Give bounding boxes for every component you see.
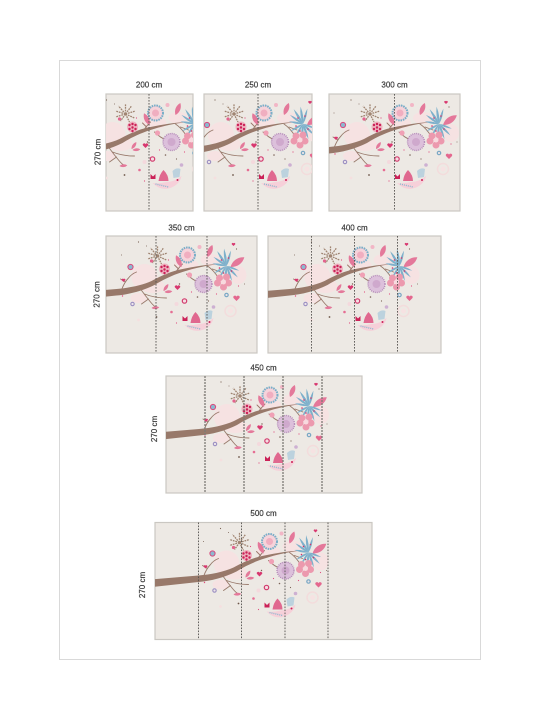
panel: 400 cm	[230, 224, 441, 353]
panel: 250 cm	[133, 80, 323, 211]
mural: 500 cm	[138, 522, 372, 640]
mural: 300 cm	[269, 94, 460, 211]
width label: 200 cm: 200 cm	[136, 80, 162, 90]
height label: 270 cm: 270 cm	[94, 139, 102, 165]
height label: 270 cm: 270 cm	[138, 572, 147, 598]
width label: 350 cm: 350 cm	[168, 224, 195, 232]
panel: 450 cm	[139, 364, 362, 493]
mural: 400 cm	[230, 236, 441, 353]
width label: 300 cm: 300 cm	[381, 80, 408, 90]
width label: 450 cm: 450 cm	[250, 364, 277, 372]
mural: 250 cm	[133, 94, 323, 211]
width label: 250 cm: 250 cm	[245, 80, 271, 90]
width label: 400 cm: 400 cm	[341, 224, 368, 232]
mural: 450 cm	[139, 376, 362, 493]
panel: 350 cm	[56, 224, 257, 353]
height label: 270 cm: 270 cm	[92, 281, 102, 308]
page frame	[60, 60, 480, 660]
height label: 270 cm: 270 cm	[150, 416, 159, 442]
mural: 350 cm	[56, 236, 257, 353]
panel: 200 cm	[24, 80, 214, 211]
mural: 200 cm	[24, 94, 214, 211]
panel: 500 cm	[138, 509, 372, 640]
panel: 300 cm	[269, 80, 460, 211]
width label: 500 cm: 500 cm	[250, 509, 277, 518]
